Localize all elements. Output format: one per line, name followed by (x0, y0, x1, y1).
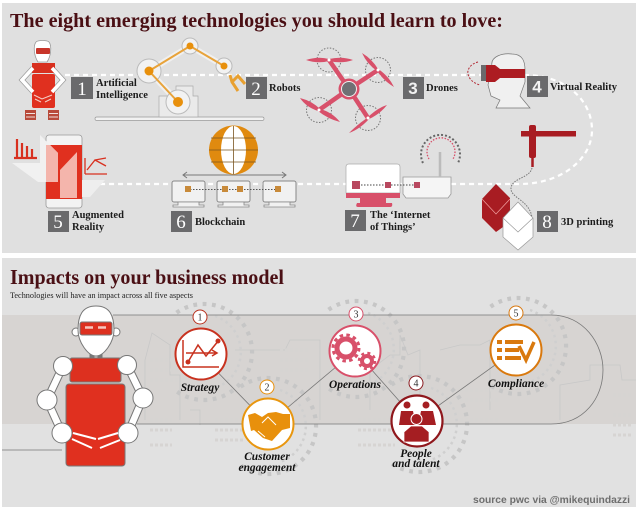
label: Drones: Drones (426, 83, 458, 94)
badge 4 (409, 376, 423, 390)
number 3 (403, 77, 424, 99)
icon: robot arm (95, 38, 264, 120)
connector track (2, 315, 603, 450)
label: Robots: Robots (269, 83, 301, 94)
label: people and talent: and talent (392, 458, 440, 470)
label: Artificial Intelligence: Artificial (96, 78, 137, 89)
badge 2 (260, 380, 274, 394)
number 4 (527, 76, 548, 97)
number 4: 4 (532, 78, 542, 96)
icon: drone (300, 48, 394, 133)
number 5 (48, 211, 69, 233)
badge 5 (509, 306, 523, 320)
label: compliance: Compliance (488, 378, 544, 390)
badge 1: 1 (198, 312, 202, 324)
number 1 (71, 77, 93, 100)
inner dotted rings (215, 310, 556, 462)
dotted gear rings (176, 298, 566, 474)
label: customer engagement: Customer (244, 451, 290, 463)
circle: strategy (176, 328, 226, 380)
number 8 (537, 211, 558, 233)
circle: customer engagement (242, 398, 294, 450)
label: operations: Operations (329, 379, 382, 391)
icon: blockchain (172, 126, 296, 207)
dotted connector path (65, 75, 592, 184)
badge 3 (349, 307, 363, 321)
icon: internet of things (346, 135, 460, 207)
icon: large robot (37, 306, 153, 466)
label: Augmented Reality: Reality (72, 222, 105, 233)
label: The Internet of Things: of Things’ (370, 222, 416, 233)
badge 2: 2 (264, 382, 270, 394)
label: The Internet of Things: The ‘Internet (370, 210, 431, 221)
heading: impacts: Impacts on your business model (10, 265, 284, 289)
panel: business model (2, 258, 636, 507)
label: people and talent: People (400, 448, 432, 460)
number 6 (171, 211, 192, 233)
skyline (145, 333, 636, 445)
number 5: 5 (53, 212, 63, 233)
label: Augmented Reality: Augmented (72, 210, 124, 221)
icon: VR headset (468, 54, 530, 108)
number 6: 6 (176, 212, 186, 233)
badge 4: 4 (414, 378, 418, 390)
badge 3: 3 (354, 310, 358, 320)
label: Blockchain: Blockchain (195, 217, 245, 228)
circle: operations (330, 326, 380, 376)
icon: AI robot (22, 40, 63, 120)
number 2: 2 (251, 79, 261, 100)
number 2 (246, 77, 267, 100)
number 7 (345, 210, 366, 232)
circle: people and talent (392, 396, 442, 446)
label: strategy: Strategy (181, 382, 220, 394)
badge 1 (193, 310, 207, 324)
number 3: 3 (408, 79, 418, 98)
label: customer engagement: engagement (239, 462, 296, 474)
band background (2, 315, 636, 424)
number 8: 8 (542, 212, 552, 233)
label: Virtual Reality: Virtual Reality (550, 82, 618, 93)
icon: 3D printer (482, 125, 576, 250)
title: The eight emerging technologies you should learn to love: (10, 10, 503, 32)
number 1: 1 (77, 79, 87, 100)
number 7: 7 (350, 211, 360, 232)
label: Artificial Intelligence: Intelligence (96, 90, 148, 101)
source credit: source pwc via @mikequindazzi (473, 494, 630, 506)
label: 3D printing: 3D printing (561, 217, 614, 228)
icon: AR phone (12, 135, 107, 208)
badge 5: 5 (514, 308, 518, 320)
panel: eight technologies (2, 3, 636, 253)
circle: compliance (490, 324, 542, 376)
subheading: Technologies will have an impact across all five aspects (10, 291, 193, 300)
